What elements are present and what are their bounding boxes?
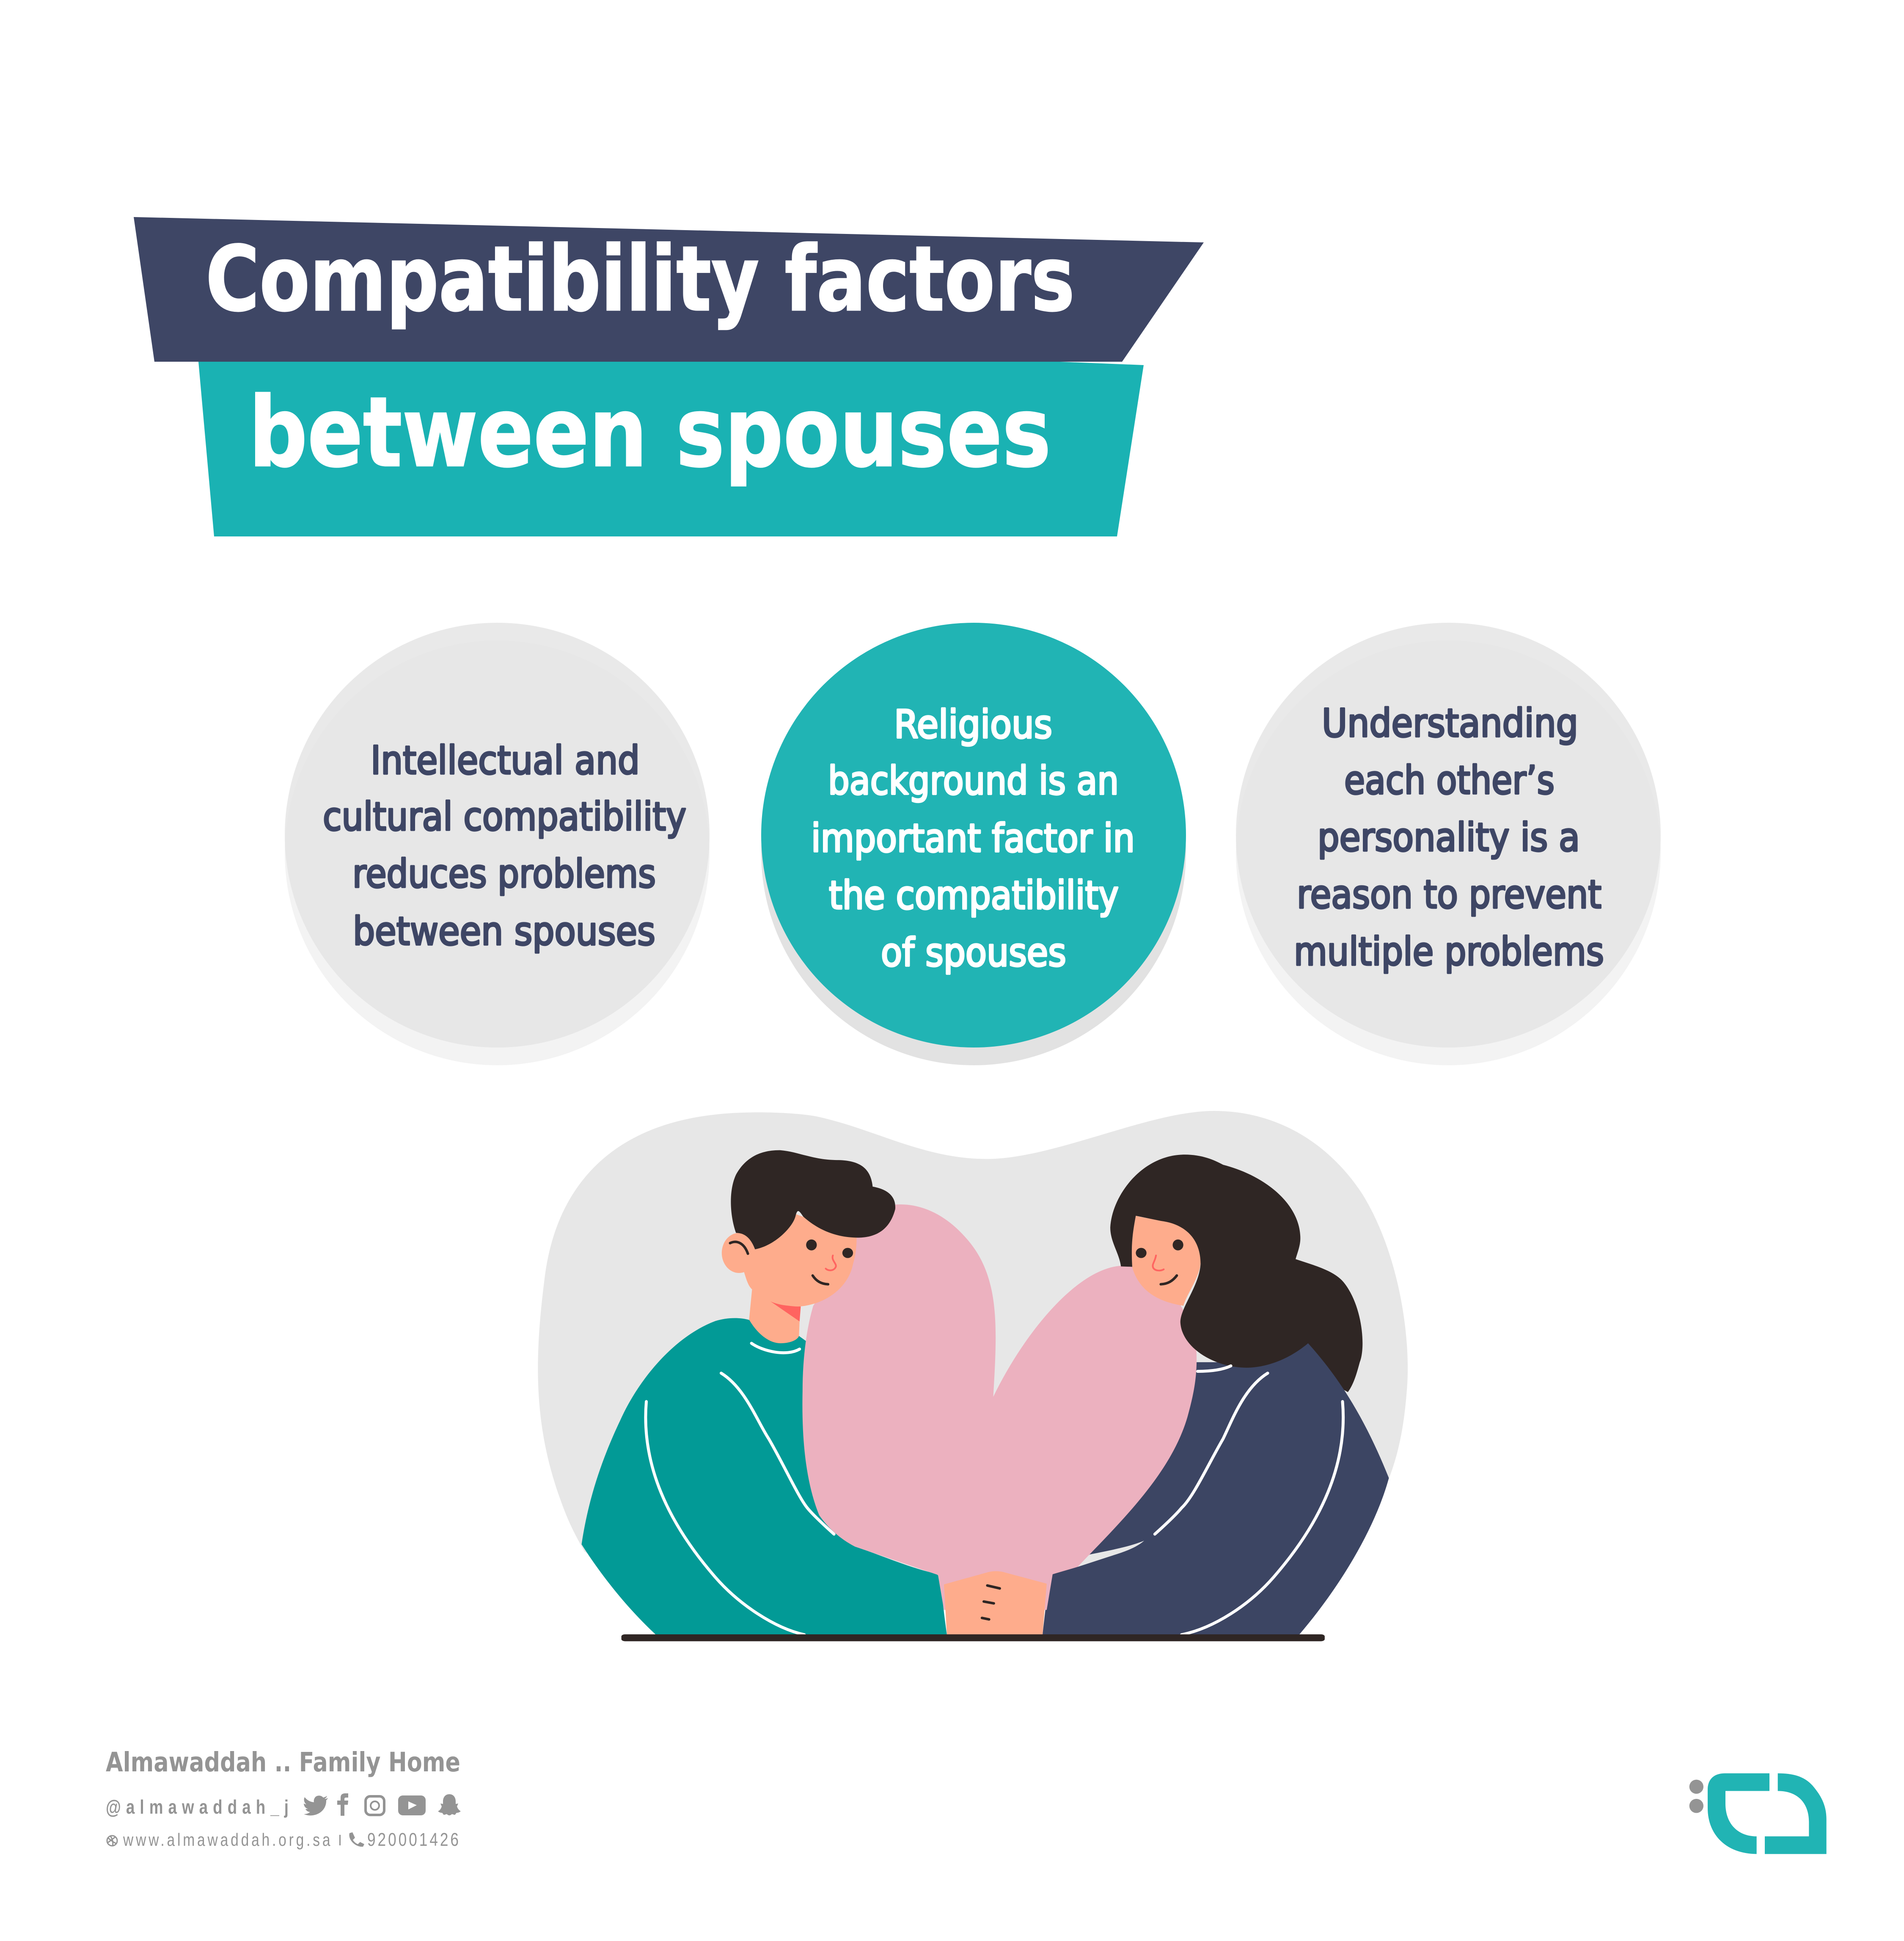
footer phone number: 920001426 bbox=[367, 1829, 459, 1850]
circle 2 text bbox=[811, 702, 1135, 975]
illustration: couple with heart bbox=[538, 1111, 1408, 1641]
man eyes bbox=[806, 1240, 853, 1258]
footer: contact block bbox=[106, 1747, 461, 1850]
circle 1 text bbox=[323, 738, 686, 954]
gap between heart and woman's sleeve bbox=[1078, 1541, 1144, 1567]
footer tagline: Almawaddah .. Family Home bbox=[106, 1747, 460, 1778]
circle 2 text: background is an bbox=[828, 758, 1119, 803]
man mouth bbox=[813, 1276, 828, 1284]
background blob bbox=[538, 1111, 1408, 1610]
woman face bbox=[1132, 1216, 1201, 1306]
man face bbox=[744, 1213, 857, 1306]
panel: understanding personality circle bbox=[1236, 623, 1661, 1065]
logo dots bbox=[1689, 1780, 1703, 1813]
footer social handle: @almawaddah_j bbox=[106, 1796, 289, 1818]
circle 2 text: of spouses bbox=[881, 930, 1066, 975]
woman nose bbox=[1153, 1256, 1164, 1270]
circle 1 text: cultural compatibility bbox=[323, 794, 686, 839]
circle 3 text: each other’s bbox=[1344, 758, 1555, 803]
logo left bracket bbox=[1708, 1773, 1769, 1854]
man torso bbox=[581, 1318, 947, 1635]
man hair bbox=[731, 1150, 895, 1249]
circle 2 text: Religious bbox=[894, 702, 1052, 747]
circle 3 text: reason to prevent bbox=[1297, 872, 1601, 917]
infographic canvas bbox=[106, 217, 1827, 1854]
title banner: teal band bbox=[198, 362, 1144, 536]
circle 3 text: personality is a bbox=[1318, 815, 1580, 860]
circle 1 text: between spouses bbox=[353, 909, 655, 954]
circle 1 text: reduces problems bbox=[352, 851, 656, 896]
finger lines bbox=[982, 1586, 1000, 1619]
man ear bbox=[722, 1233, 756, 1273]
ground bar bbox=[622, 1634, 1325, 1641]
footer separator bbox=[339, 1835, 341, 1845]
icon: phone bbox=[349, 1832, 364, 1847]
woman torso bbox=[1043, 1343, 1389, 1635]
icon: facebook bbox=[337, 1793, 348, 1816]
clasped hands bbox=[944, 1571, 1047, 1635]
icon: globe bbox=[107, 1836, 117, 1846]
circle 2 text: important factor in bbox=[811, 816, 1135, 861]
circle 3 text bbox=[1294, 701, 1604, 974]
man neck shadow bbox=[770, 1301, 801, 1321]
circle 2 text: the compatibility bbox=[829, 873, 1119, 918]
footer website: www.almawaddah.org.sa bbox=[123, 1831, 330, 1850]
title line 2: between spouses bbox=[249, 376, 1051, 489]
icon: snapchat bbox=[438, 1794, 461, 1815]
panel: intellectual compatibility circle bbox=[285, 623, 710, 1065]
panel: religious background circle bbox=[761, 623, 1186, 1065]
circle 3 text: multiple problems bbox=[1294, 929, 1604, 974]
icon: twitter bbox=[304, 1795, 328, 1815]
woman back hair bbox=[1279, 1259, 1362, 1392]
clothing lines bbox=[646, 1343, 1343, 1635]
logo right bracket bbox=[1765, 1773, 1827, 1854]
title banner bbox=[134, 217, 1204, 536]
heart bbox=[802, 1204, 1197, 1610]
title line 1: Compatibility factors bbox=[206, 227, 1075, 331]
woman hair bbox=[1110, 1155, 1339, 1368]
man neck bbox=[749, 1289, 800, 1343]
icon: instagram bbox=[366, 1796, 384, 1815]
woman mouth bbox=[1161, 1276, 1177, 1284]
circle 3 text: Understanding bbox=[1322, 701, 1578, 746]
title banner: navy band bbox=[134, 217, 1204, 362]
logo bbox=[1689, 1773, 1827, 1854]
man ear line bbox=[730, 1242, 748, 1254]
man nose bbox=[826, 1256, 836, 1270]
icon: youtube bbox=[398, 1795, 426, 1815]
woman eyes bbox=[1136, 1240, 1183, 1258]
circle 1 text: Intellectual and bbox=[371, 738, 640, 783]
